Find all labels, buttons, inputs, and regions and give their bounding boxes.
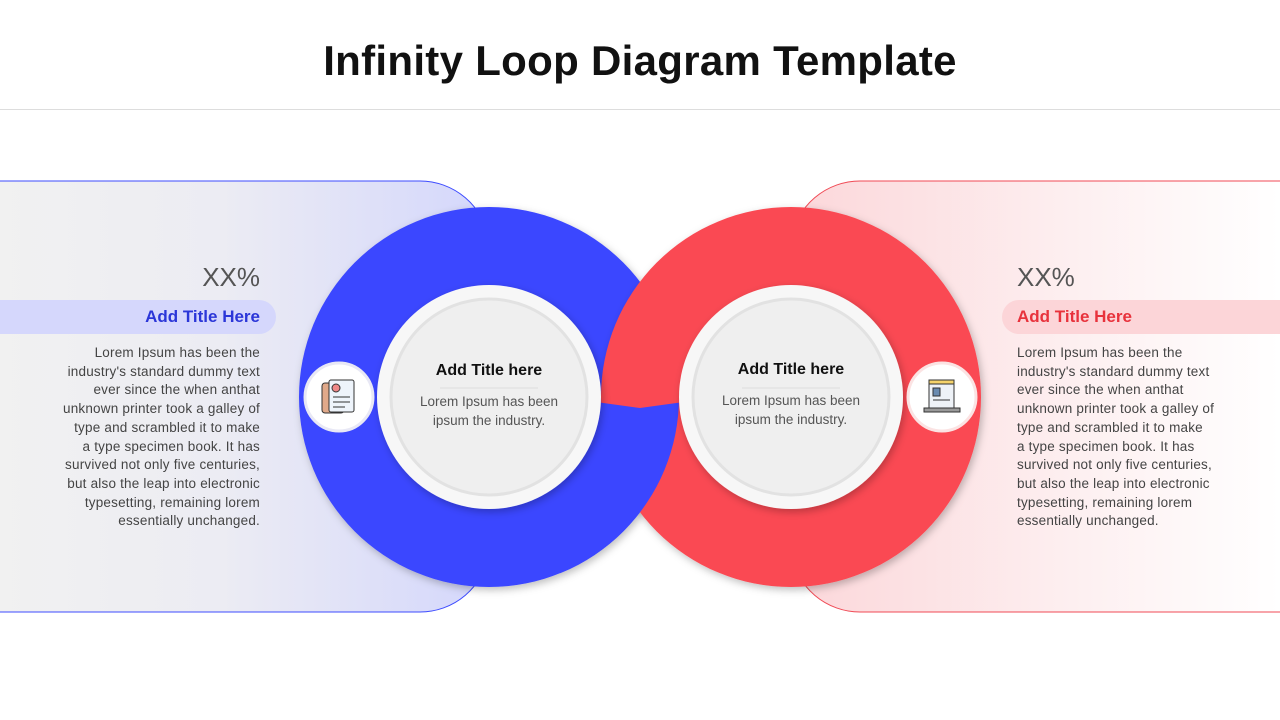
panel: left xyxy=(0,181,489,612)
ring: red xyxy=(601,207,981,587)
left text: industry's standard dummy text xyxy=(68,364,260,379)
center left text: Lorem Ipsum has been xyxy=(420,394,558,409)
plate: right xyxy=(679,285,903,509)
left text: type and scrambled it to make xyxy=(74,420,260,435)
left percent: XX% xyxy=(202,262,260,292)
right title pill: Add Title Here xyxy=(1017,307,1132,326)
center left text: Add Title here xyxy=(436,362,542,379)
right text: a type specimen book. It has xyxy=(1017,439,1194,454)
left text: typesetting, remaining lorem xyxy=(85,495,260,510)
center right text: Add Title here xyxy=(738,361,844,378)
diagram xyxy=(0,180,1280,612)
center left text: ipsum the industry. xyxy=(433,413,545,428)
right text: Lorem Ipsum has been the xyxy=(1017,345,1182,360)
icon: laptop xyxy=(908,363,976,431)
right percent: XX% xyxy=(1017,262,1075,292)
right text: essentially unchanged. xyxy=(1017,513,1159,528)
left text: unknown printer took a galley of xyxy=(63,401,260,416)
icon: document xyxy=(305,363,373,431)
right text: typesetting, remaining lorem xyxy=(1017,495,1192,510)
right text: ever since the when anthat xyxy=(1017,382,1184,397)
title: Infinity Loop Diagram Template xyxy=(323,37,957,84)
left text: essentially unchanged. xyxy=(118,513,260,528)
left text: a type specimen book. It has xyxy=(83,439,260,454)
center left text xyxy=(420,362,558,428)
right text: industry's standard dummy text xyxy=(1017,364,1209,379)
left title pill xyxy=(0,300,276,334)
left text: ever since the when anthat xyxy=(93,382,260,397)
right text xyxy=(1017,345,1214,528)
right text: type and scrambled it to make xyxy=(1017,420,1203,435)
right text: unknown printer took a galley of xyxy=(1017,401,1214,416)
left text: but also the leap into electronic xyxy=(67,476,260,491)
left title pill: Add Title Here xyxy=(145,307,260,326)
center right text: Lorem Ipsum has been xyxy=(722,393,860,408)
panel: right xyxy=(791,181,1280,612)
right text: survived not only five centuries, xyxy=(1017,457,1212,472)
ring: blue xyxy=(299,207,679,587)
left text: survived not only five centuries, xyxy=(65,457,260,472)
center right text xyxy=(722,361,860,427)
right text: but also the leap into electronic xyxy=(1017,476,1210,491)
left text xyxy=(63,345,260,528)
ring: blue overlap lower xyxy=(560,402,679,574)
left text: Lorem Ipsum has been the xyxy=(95,345,260,360)
center right text: ipsum the industry. xyxy=(735,412,847,427)
right title pill xyxy=(1002,300,1280,334)
plate: left xyxy=(377,285,601,509)
